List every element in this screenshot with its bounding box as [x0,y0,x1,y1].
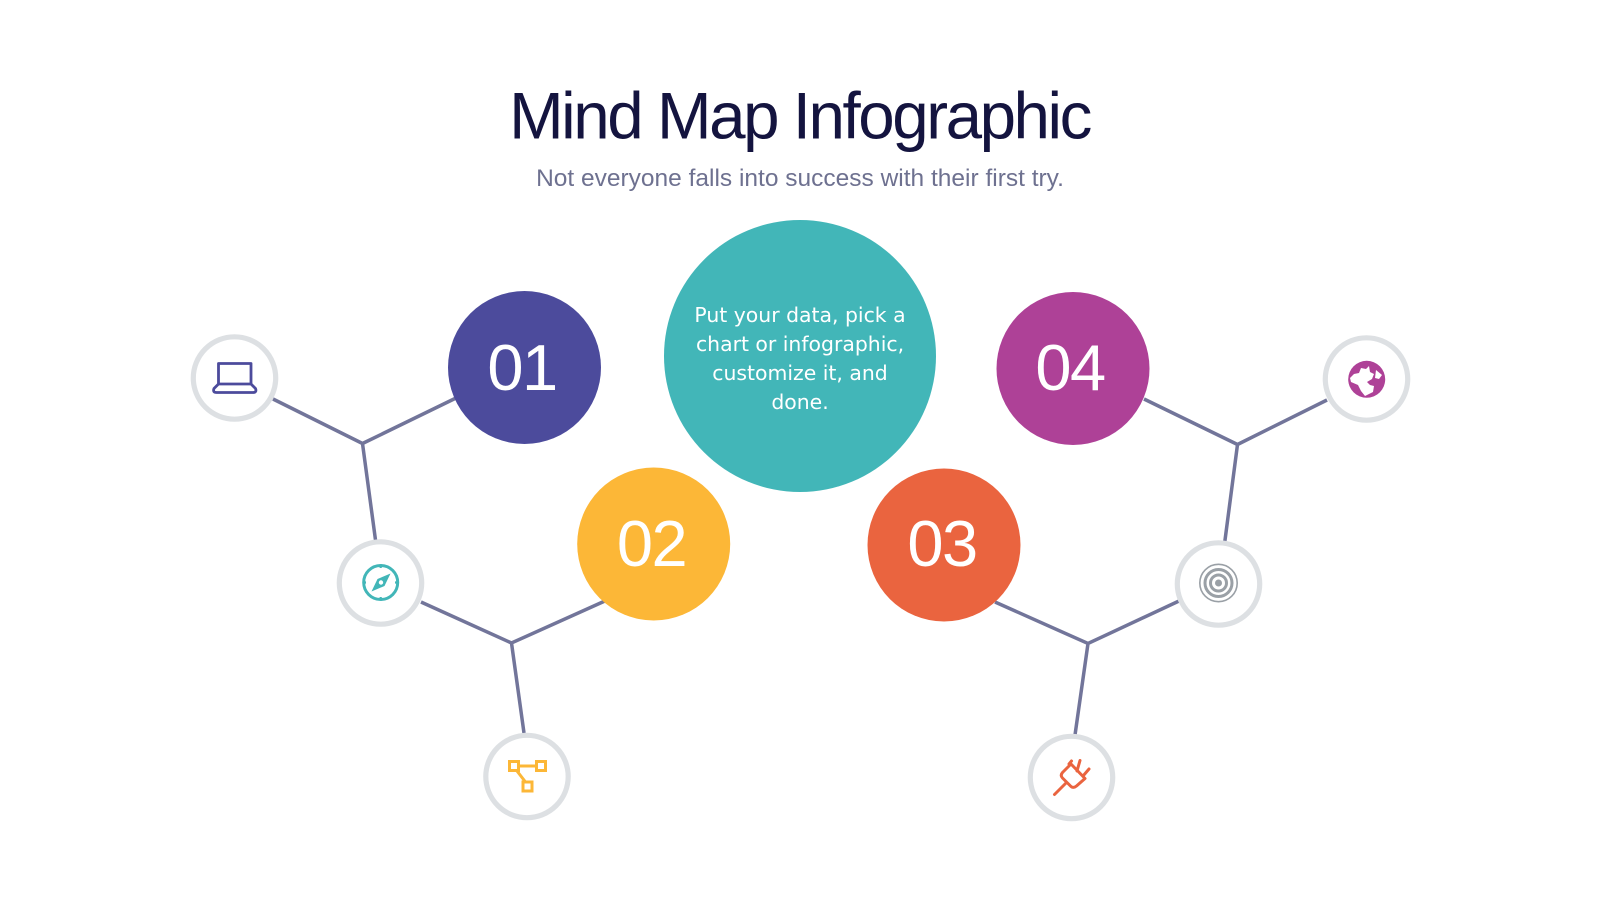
central text [694,303,906,414]
icon: globe [1325,338,1408,420]
connector: branch 04 [1144,399,1327,544]
central text: chart or infographic, [696,332,904,356]
connector: branch 02 [421,600,606,733]
node 02: 02 [617,507,686,580]
node 03 [868,468,1020,622]
icon: plug [1030,736,1113,819]
node 02 [577,468,730,620]
icon: target [1177,543,1260,625]
subtitle: Not everyone falls into success with their first try. [536,165,1064,192]
title: Mind Map Infographic [509,80,1092,152]
central text: Put your data, pick a [694,303,906,327]
node 03: 03 [907,507,977,580]
node 01 [448,291,601,444]
icon: network [486,735,568,818]
node 04 [996,292,1150,445]
central text: done. [771,390,829,414]
node 04: 04 [1035,331,1105,404]
node 01: 01 [487,331,557,404]
central text: customize it, and [712,361,888,385]
central circle [664,220,936,492]
connector: branch 01 [273,398,455,540]
connector: branch 03 [995,601,1179,735]
icon: laptop [193,337,276,419]
icon: compass [339,542,422,624]
